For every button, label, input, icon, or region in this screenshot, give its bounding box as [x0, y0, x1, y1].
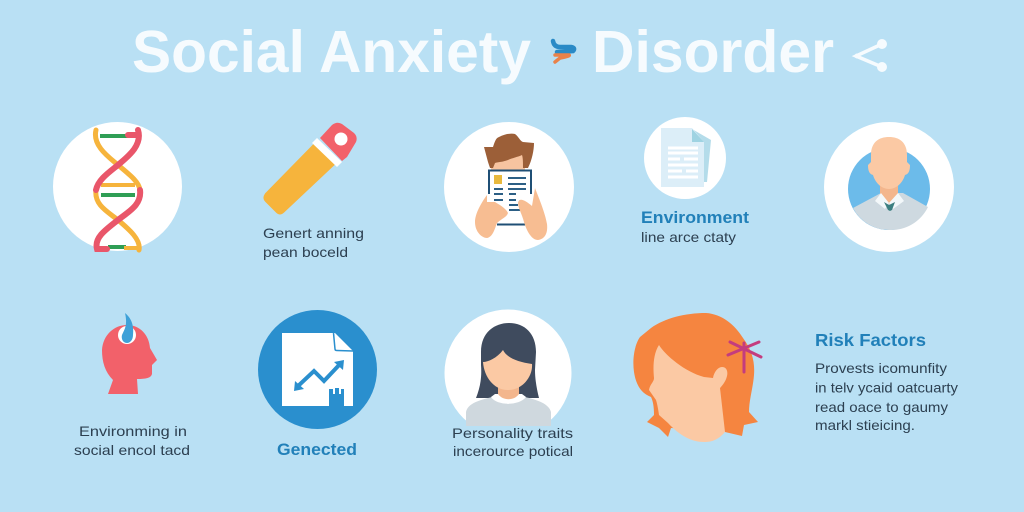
text block: in telv ycaid oatcuarty — [815, 380, 958, 396]
text block: Provests icomunfity — [815, 360, 947, 376]
panel: woman avatar: incerource potical — [453, 443, 573, 459]
icon: document — [282, 333, 353, 406]
red strand — [96, 130, 140, 249]
icon: pencil — [266, 123, 357, 212]
panel: pencil icon with label: pean boceld — [263, 244, 348, 260]
panel: orange-haired head — [633, 313, 761, 442]
title: Disorder — [592, 19, 834, 85]
heading: Genected — [277, 441, 357, 459]
panel: pencil icon with label — [263, 123, 364, 260]
title: Social Anxiety — [132, 19, 531, 85]
icon: swirl connector — [553, 41, 574, 62]
title — [132, 19, 886, 85]
rungs — [100, 136, 138, 248]
text block — [815, 360, 958, 433]
panel: man avatar — [824, 122, 954, 252]
panel: document chart — [258, 310, 377, 459]
heading: Environment — [641, 209, 750, 227]
orange strand — [95, 130, 140, 250]
panel: person reading document — [444, 122, 574, 252]
document — [489, 170, 531, 224]
body — [466, 397, 551, 426]
left hand — [475, 195, 508, 238]
neck — [498, 380, 519, 399]
icon: asterisk clip — [728, 342, 761, 372]
label: Genert anning — [263, 225, 364, 241]
panel: head with flame — [74, 313, 190, 458]
panel: risk factors — [815, 330, 958, 433]
right hand — [518, 188, 547, 240]
icon: share — [855, 40, 886, 72]
panel: head with flame: social encol tacd — [74, 442, 190, 458]
text block: read oace to gaumy — [815, 399, 948, 415]
panel: woman avatar — [444, 310, 573, 459]
hair — [484, 134, 534, 168]
hair — [476, 323, 539, 398]
shirt — [853, 193, 928, 230]
label: line arce ctaty — [641, 229, 736, 245]
collar — [875, 193, 904, 209]
face — [649, 345, 727, 442]
hair — [633, 313, 758, 437]
heading: Risk Factors — [815, 330, 926, 350]
text block: markl stieicing. — [815, 417, 915, 433]
panel: environment — [641, 117, 750, 245]
label: Personality traits — [452, 425, 573, 441]
label: Environming in — [79, 423, 187, 439]
icon: tower — [329, 388, 344, 406]
icon: document — [661, 128, 711, 187]
face — [483, 350, 532, 390]
icon: trend arrow — [297, 363, 341, 387]
icon: flame — [118, 313, 136, 344]
head — [868, 137, 910, 189]
icon: head — [102, 325, 157, 394]
panel: DNA icon — [53, 122, 182, 251]
neck — [880, 180, 898, 204]
face — [491, 150, 525, 175]
